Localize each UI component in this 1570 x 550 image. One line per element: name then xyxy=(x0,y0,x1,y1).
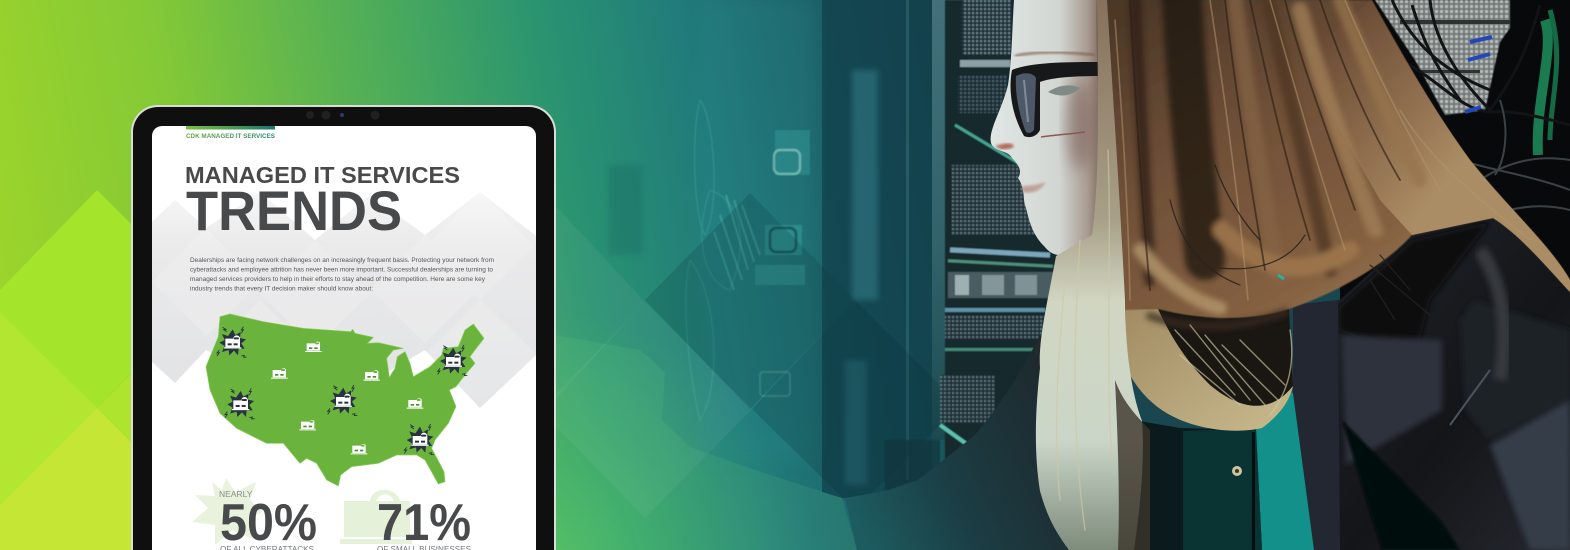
eyebrow label: CDK MANAGED IT SERVICES xyxy=(186,133,276,140)
stat: nearly 50%: NEARLY xyxy=(219,489,253,499)
server rack panels xyxy=(885,0,1060,490)
faded server rack behind gradient xyxy=(608,0,962,498)
icon: attacked building xyxy=(438,345,467,376)
icon: attacked building xyxy=(328,385,357,416)
hair tonal bands xyxy=(1135,0,1420,326)
icon: attacked building xyxy=(217,327,247,357)
left diamond pattern xyxy=(0,190,205,550)
upper right cabling background xyxy=(1340,0,1570,330)
icon: faint building behind stat xyxy=(340,490,412,544)
heading bar xyxy=(186,126,275,130)
person: dark shirt xyxy=(1080,400,1320,550)
icon: building xyxy=(351,444,367,454)
map: United States with building icons xyxy=(206,314,484,486)
icon: attacked building xyxy=(225,388,255,419)
intro paragraph: managed services providers to help in their efforts to stay ahead of the competition. Here are some key xyxy=(190,276,486,283)
person: face xyxy=(991,0,1105,255)
glasses xyxy=(1010,62,1100,137)
translucent arm reaching into rack xyxy=(555,335,857,550)
person: hair xyxy=(1036,0,1570,550)
screen grey diamond band xyxy=(152,192,536,408)
intro paragraph: Dealerships are facing network challenges on an increasingly frequent basis. Protecting your network from xyxy=(190,257,494,264)
icon: building xyxy=(407,398,423,409)
title line 1: MANAGED IT SERVICES xyxy=(185,162,460,188)
person: jacket xyxy=(1293,218,1570,550)
person: sleeve xyxy=(845,335,1080,550)
tablet camera dots xyxy=(306,110,380,120)
intro paragraph xyxy=(190,257,494,292)
intro paragraph: industry trends that every IT decision maker should know about: xyxy=(190,286,373,292)
icon: power outlets xyxy=(755,130,810,396)
icon: attacked building xyxy=(404,424,434,455)
icon: building xyxy=(271,368,288,379)
icon: building xyxy=(363,370,380,381)
icon: building xyxy=(299,420,316,430)
tablet body xyxy=(131,105,556,550)
person: teal shirt xyxy=(1183,319,1314,550)
icon: building xyxy=(305,342,322,352)
tablet device xyxy=(131,105,556,550)
intro paragraph: cyberattacks and employee attrition has never been more important. Successful dealerships are turning to xyxy=(190,266,494,274)
tablet screen xyxy=(152,126,536,550)
icon: faint burst behind stat xyxy=(192,478,262,545)
middle diamond overlays xyxy=(540,193,960,518)
title line 2: TRENDS xyxy=(186,179,402,242)
